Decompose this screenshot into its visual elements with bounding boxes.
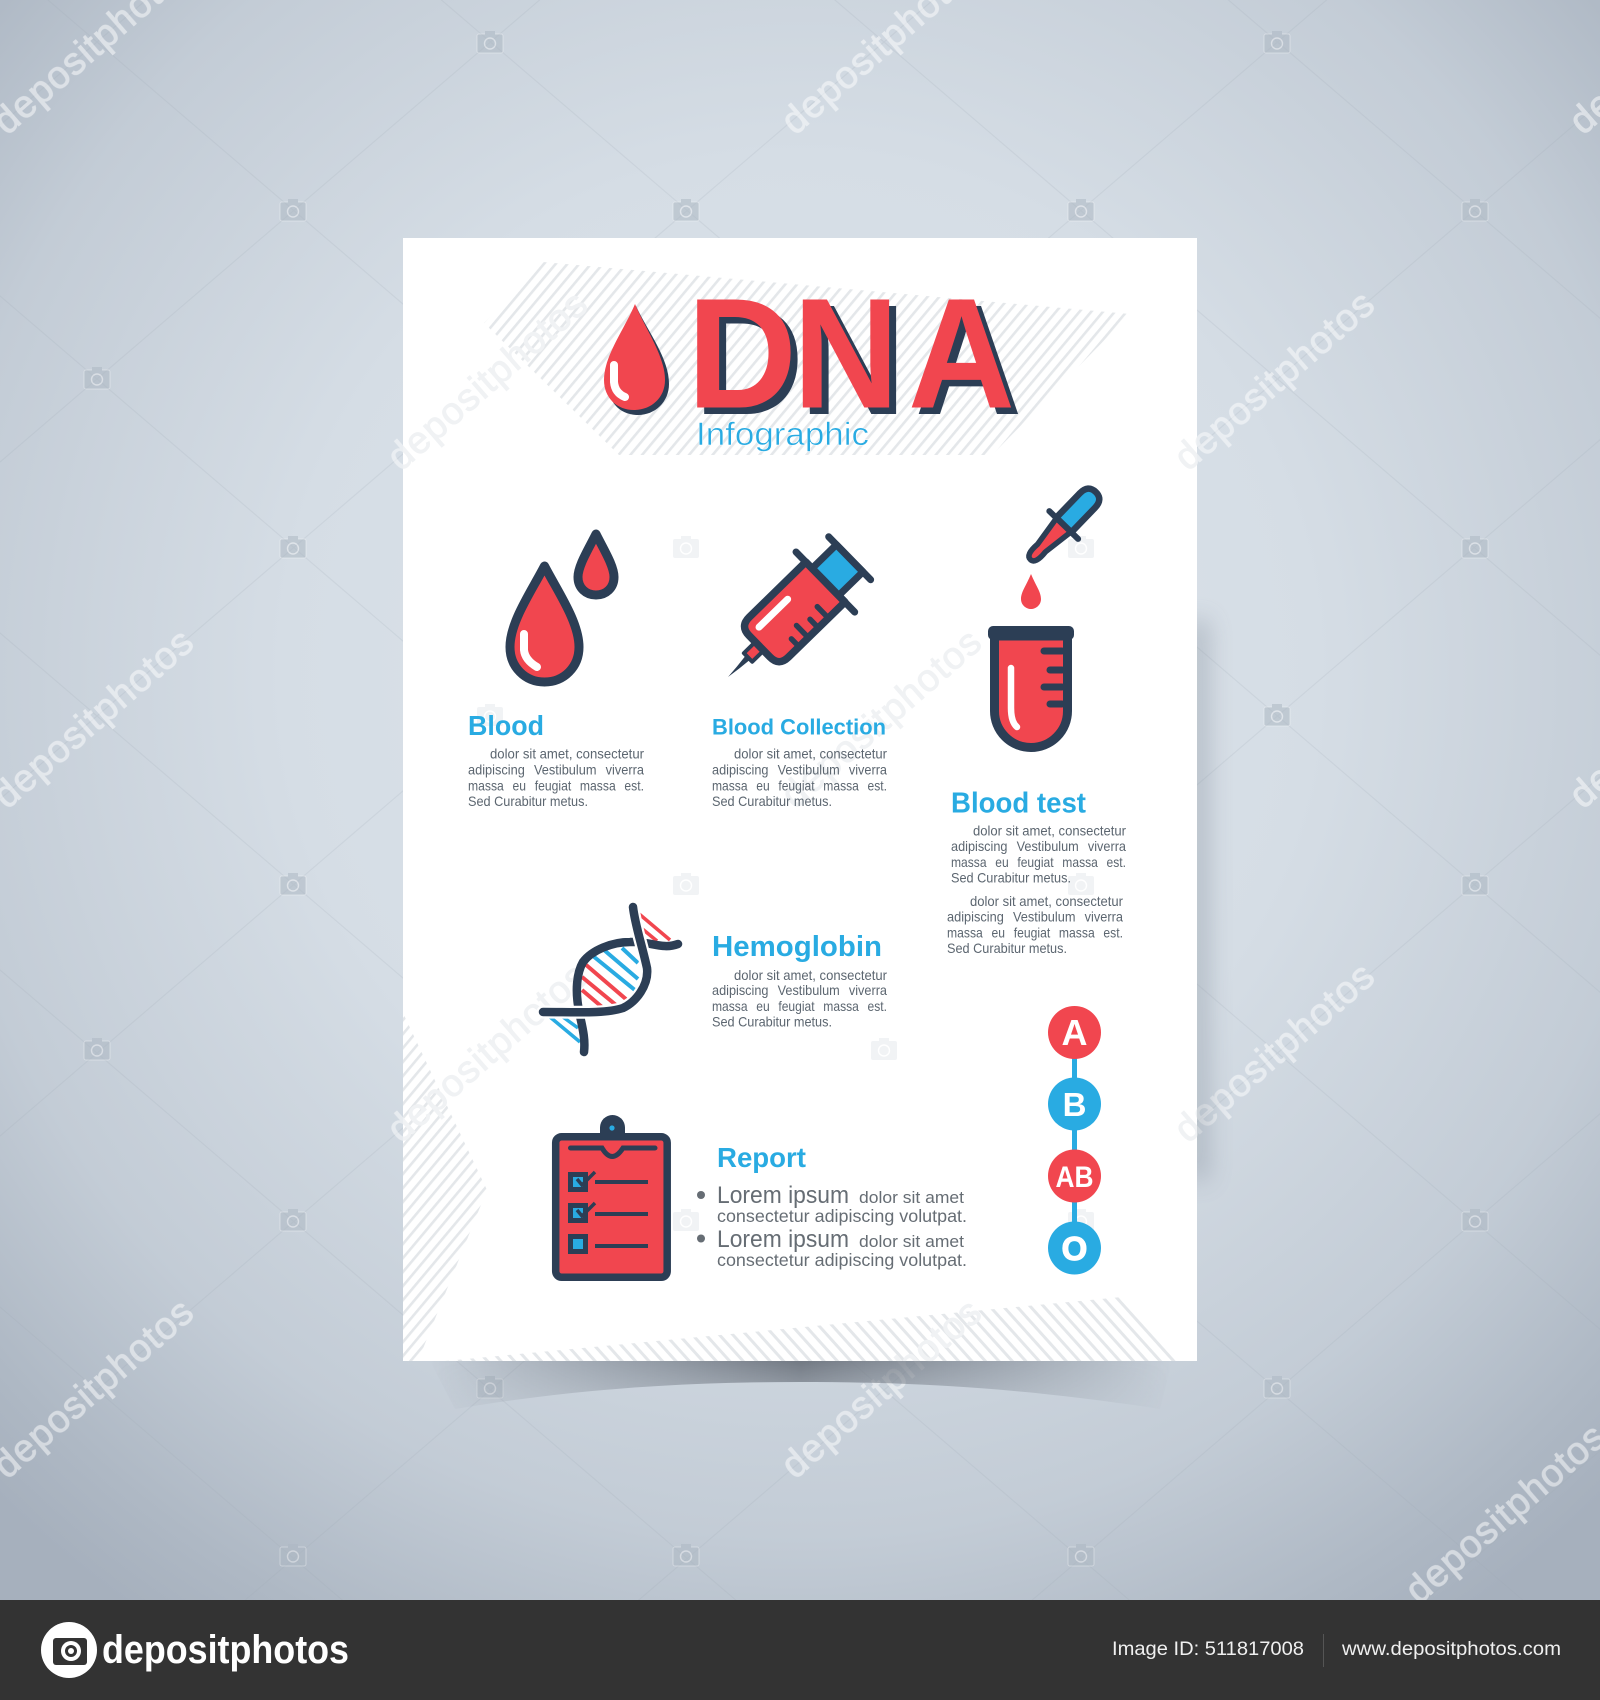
title: DNA [687,266,1022,448]
top triangle stripes [638,913,670,941]
body text: second paragraph: dolor sit amet, consectetur [970,894,1123,909]
bullet item 2: dolor sit amet [859,1232,964,1251]
bottom triangle stripes [550,1017,580,1042]
watermarks on paper [379,283,1383,1487]
body text: Sed Curabitur metus. [468,794,588,809]
body text: dolor sit amet, consectetur [734,968,887,983]
bullet item 2 [697,1226,967,1270]
heading: Hemoglobin [712,931,882,963]
icon: test tube [988,626,1074,748]
centre red stripes [582,964,627,1007]
watermarks on paper: depositphotos [773,1291,990,1487]
footer bar [0,1600,1600,1700]
body text: massa eu feugiat massa est. [712,999,887,1014]
body text: dolor sit amet, consectetur [490,747,644,762]
body text: Sed Curabitur metus. [712,794,832,809]
title: DNA: D [687,266,797,442]
body text: second paragraph: Sed Curabitur metus. [947,941,1067,956]
blood type O [1048,1222,1101,1274]
blood type A: A [1062,1012,1088,1053]
body text: second paragraph: adipiscing Vestibulum viverra [947,910,1123,925]
blood type B: B [1063,1086,1086,1123]
section: Report [697,1142,967,1270]
section: Blood Collection [712,715,887,809]
title: DNA: A [908,266,1015,442]
checklist row 1 [570,1172,648,1190]
blood type O: O [1062,1230,1087,1267]
blood type chain [1048,1006,1101,1274]
body text: adipiscing Vestibulum viverra [712,762,887,778]
body text [468,747,644,809]
section: Hemoglobin [712,931,887,1030]
icon: falling drop [1021,574,1041,609]
footer logo text: depositphotos [102,1628,349,1672]
bullet item 1: Lorem ipsum [717,1182,849,1209]
body text: first paragraph [951,824,1126,886]
section: Blood test [947,788,1126,956]
body text: second paragraph [947,894,1123,956]
watermarks on background: depositphotos [1166,283,1383,479]
icon: clipboard report [556,1115,667,1277]
icon: blood drops [510,534,614,682]
title: DNA: N [793,266,899,442]
icon: DNA helix [543,907,678,1052]
website: www.depositphotos.com [1341,1638,1561,1660]
watermarks on paper: depositphotos [1166,955,1383,1151]
footer logo icon [41,1622,97,1678]
image id: Image ID: 511817008 [1112,1638,1304,1660]
section: Blood [468,710,644,809]
bullet item 1: consectetur adipiscing volutpat. [717,1206,967,1226]
bullet item 1: dolor sit amet [859,1188,964,1207]
heading: Blood Collection [712,715,886,740]
blood type B [1048,1078,1101,1130]
bullet item 2: Lorem ipsum [717,1226,849,1253]
watermarks on paper: depositphotos [379,955,596,1151]
hatch: bottom left [403,1013,487,1361]
title: DNA: N [800,273,906,448]
centre blue stripes [593,948,638,991]
heading: Blood [468,710,544,741]
checklist row 3 [570,1236,648,1252]
subtitle: Infographic: Infographic [696,416,869,452]
icon: syringe [699,528,879,707]
blood type AB [1048,1150,1101,1202]
body text: first paragraph: adipiscing Vestibulum viverra [951,839,1126,854]
watermarks on background: depositphotos [773,1291,990,1487]
body text: second paragraph: massa eu feugiat massa est. [947,926,1123,941]
body text: first paragraph: massa eu feugiat massa est. [951,855,1126,870]
body text: adipiscing Vestibulum viverra [468,762,644,778]
watermarks on background: depositphotos [1166,955,1383,1151]
body text [712,747,887,809]
icon: title drop [604,304,669,415]
watermarks on paper: depositphotos [773,621,990,817]
body text: first paragraph: dolor sit amet, consectetur [973,824,1126,838]
paper shadow [430,620,1208,1409]
title: DNA: A [915,273,1022,448]
body text: adipiscing Vestibulum viverra [712,983,887,998]
watermarks on paper: depositphotos [1166,283,1383,479]
blood type A [1048,1006,1101,1059]
title: DNA: D [694,273,804,448]
watermarks on background: depositphotos [379,955,596,1151]
heading: Blood test [951,788,1086,820]
body text: Sed Curabitur metus. [712,1014,832,1030]
body text: massa eu feugiat massa est. [468,778,644,794]
blood type AB: AB [1056,1161,1094,1194]
paper sheet [403,238,1197,1361]
body text [712,968,887,1030]
watermarks on background: depositphotos [379,283,596,479]
watermark camera icons [84,31,1488,1566]
bullet item 1 [697,1182,967,1226]
hatch: top [484,262,1130,455]
checklist row 2 [570,1203,648,1220]
body text: dolor sit amet, consectetur [734,747,887,762]
icon: dropper [1016,478,1110,573]
strands [543,907,678,1052]
body text: first paragraph: Sed Curabitur metus. [951,871,1071,886]
heading: Report [717,1142,806,1173]
bullet item 2: consectetur adipiscing volutpat. [717,1250,967,1270]
hatch: bottom [445,1297,1180,1361]
body text: massa eu feugiat massa est. [712,778,887,794]
watermarks on paper: depositphotos [379,283,596,479]
